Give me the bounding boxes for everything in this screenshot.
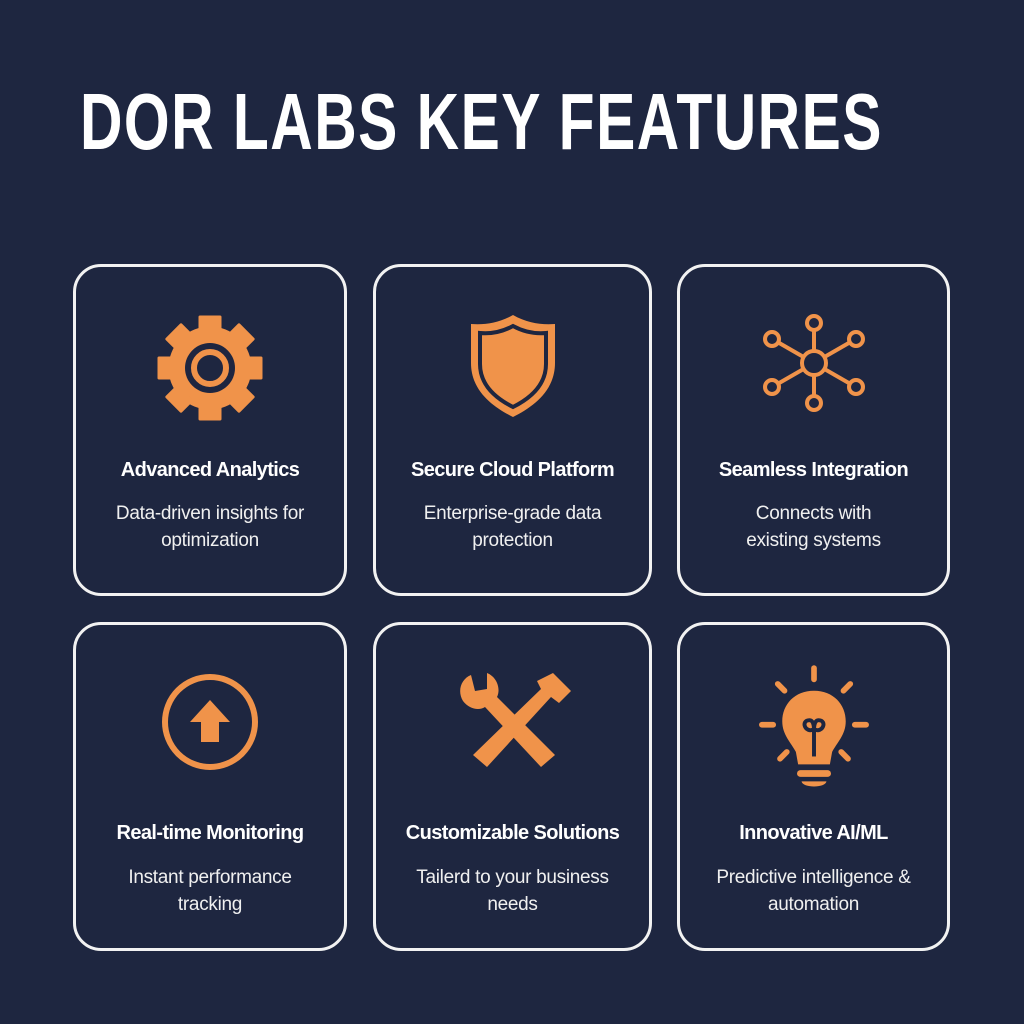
panel: seamless integration bbox=[677, 264, 950, 596]
description bbox=[416, 867, 609, 915]
heading: Seamless Integration bbox=[719, 459, 908, 481]
description: tracking bbox=[178, 894, 242, 915]
description: Predictive intelligence & bbox=[716, 867, 911, 888]
panel: secure cloud bbox=[373, 264, 652, 596]
description: automation bbox=[768, 894, 859, 915]
heading: Innovative AI/ML bbox=[739, 822, 888, 844]
description bbox=[116, 503, 304, 551]
heading: Customizable Solutions bbox=[406, 822, 619, 844]
description: needs bbox=[487, 894, 538, 915]
panel: innovative ai/ml bbox=[677, 622, 950, 951]
icon: network bbox=[763, 314, 865, 412]
description: Instant performance bbox=[128, 867, 292, 888]
icon: shield bbox=[471, 315, 555, 417]
icon: gear bbox=[158, 316, 262, 420]
description: optimization bbox=[161, 530, 259, 551]
heading: Advanced Analytics bbox=[121, 459, 299, 481]
icon: light bulb bbox=[759, 665, 869, 786]
description bbox=[746, 503, 881, 551]
panel: customizable solutions bbox=[373, 622, 652, 951]
description: Tailerd to your business bbox=[416, 867, 609, 888]
description: existing systems bbox=[746, 530, 881, 551]
panel: real-time monitoring bbox=[73, 622, 347, 951]
panel: advanced analytics bbox=[73, 264, 347, 596]
icon: wrench and hammer bbox=[460, 673, 571, 767]
heading: Secure Cloud Platform bbox=[411, 459, 614, 481]
description: protection bbox=[472, 530, 553, 551]
icon: up arrow circle bbox=[162, 674, 258, 770]
description bbox=[128, 867, 292, 915]
heading: Real-time Monitoring bbox=[117, 822, 303, 844]
description: Data-driven insights for bbox=[116, 503, 304, 524]
description: Enterprise-grade data bbox=[424, 503, 601, 524]
title: DOR LABS KEY FEATURES bbox=[80, 77, 883, 166]
description: Connects with bbox=[756, 503, 871, 524]
description bbox=[716, 867, 911, 915]
description bbox=[424, 503, 602, 551]
